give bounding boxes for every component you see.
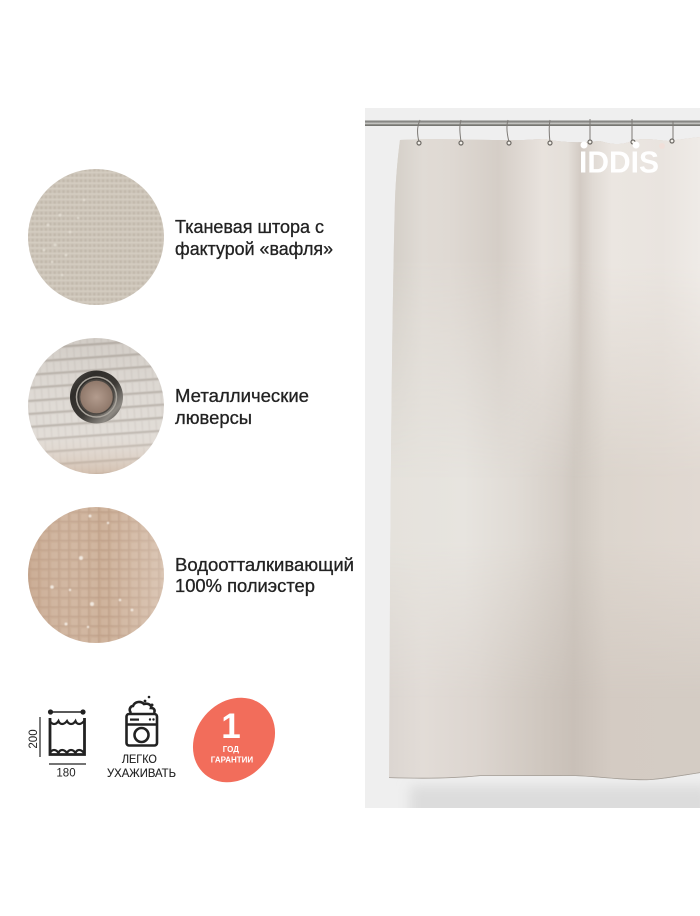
circle photo: waffle texture xyxy=(28,169,164,305)
grommet xyxy=(70,370,123,424)
text: feature 1: фактурой «вафля» xyxy=(175,239,333,259)
text: feature 3: 100% полиэстер xyxy=(175,576,315,596)
floor shadow xyxy=(409,785,700,808)
icon: curtain size 180 x 200 xyxy=(28,709,86,780)
panel: curtain photo xyxy=(365,108,700,826)
label: easy care: ЛЕГКО xyxy=(122,754,157,766)
icon: curtain size 180 x 200: 180 xyxy=(56,768,76,780)
label: easy care: УХАЖИВАТЬ xyxy=(107,768,176,780)
icon: washing machine xyxy=(126,696,158,746)
badge: 1 year warranty xyxy=(176,681,292,799)
icon: curtain size 180 x 200: 200 xyxy=(28,729,40,749)
curtain fabric xyxy=(385,130,700,790)
badge: 1 year warranty: ГАРАНТИИ xyxy=(211,756,253,764)
photo backdrop xyxy=(365,108,700,808)
circle photo: metal grommet xyxy=(28,338,164,474)
circle photo: water repellent xyxy=(28,507,164,643)
text: feature 1: Тканевая штора с xyxy=(175,217,324,237)
badge: 1 year warranty: 1 xyxy=(221,707,241,746)
text: feature 2: люверсы xyxy=(175,408,252,428)
hooks and grommets xyxy=(417,119,674,145)
logo: IDDIS: IDDIS xyxy=(579,144,659,180)
badge: 1 year warranty: ГОД xyxy=(223,745,239,754)
curtain rod xyxy=(365,120,700,126)
text: feature 3: Водоотталкивающий xyxy=(175,555,354,575)
text: feature 2: Металлические xyxy=(175,386,309,406)
